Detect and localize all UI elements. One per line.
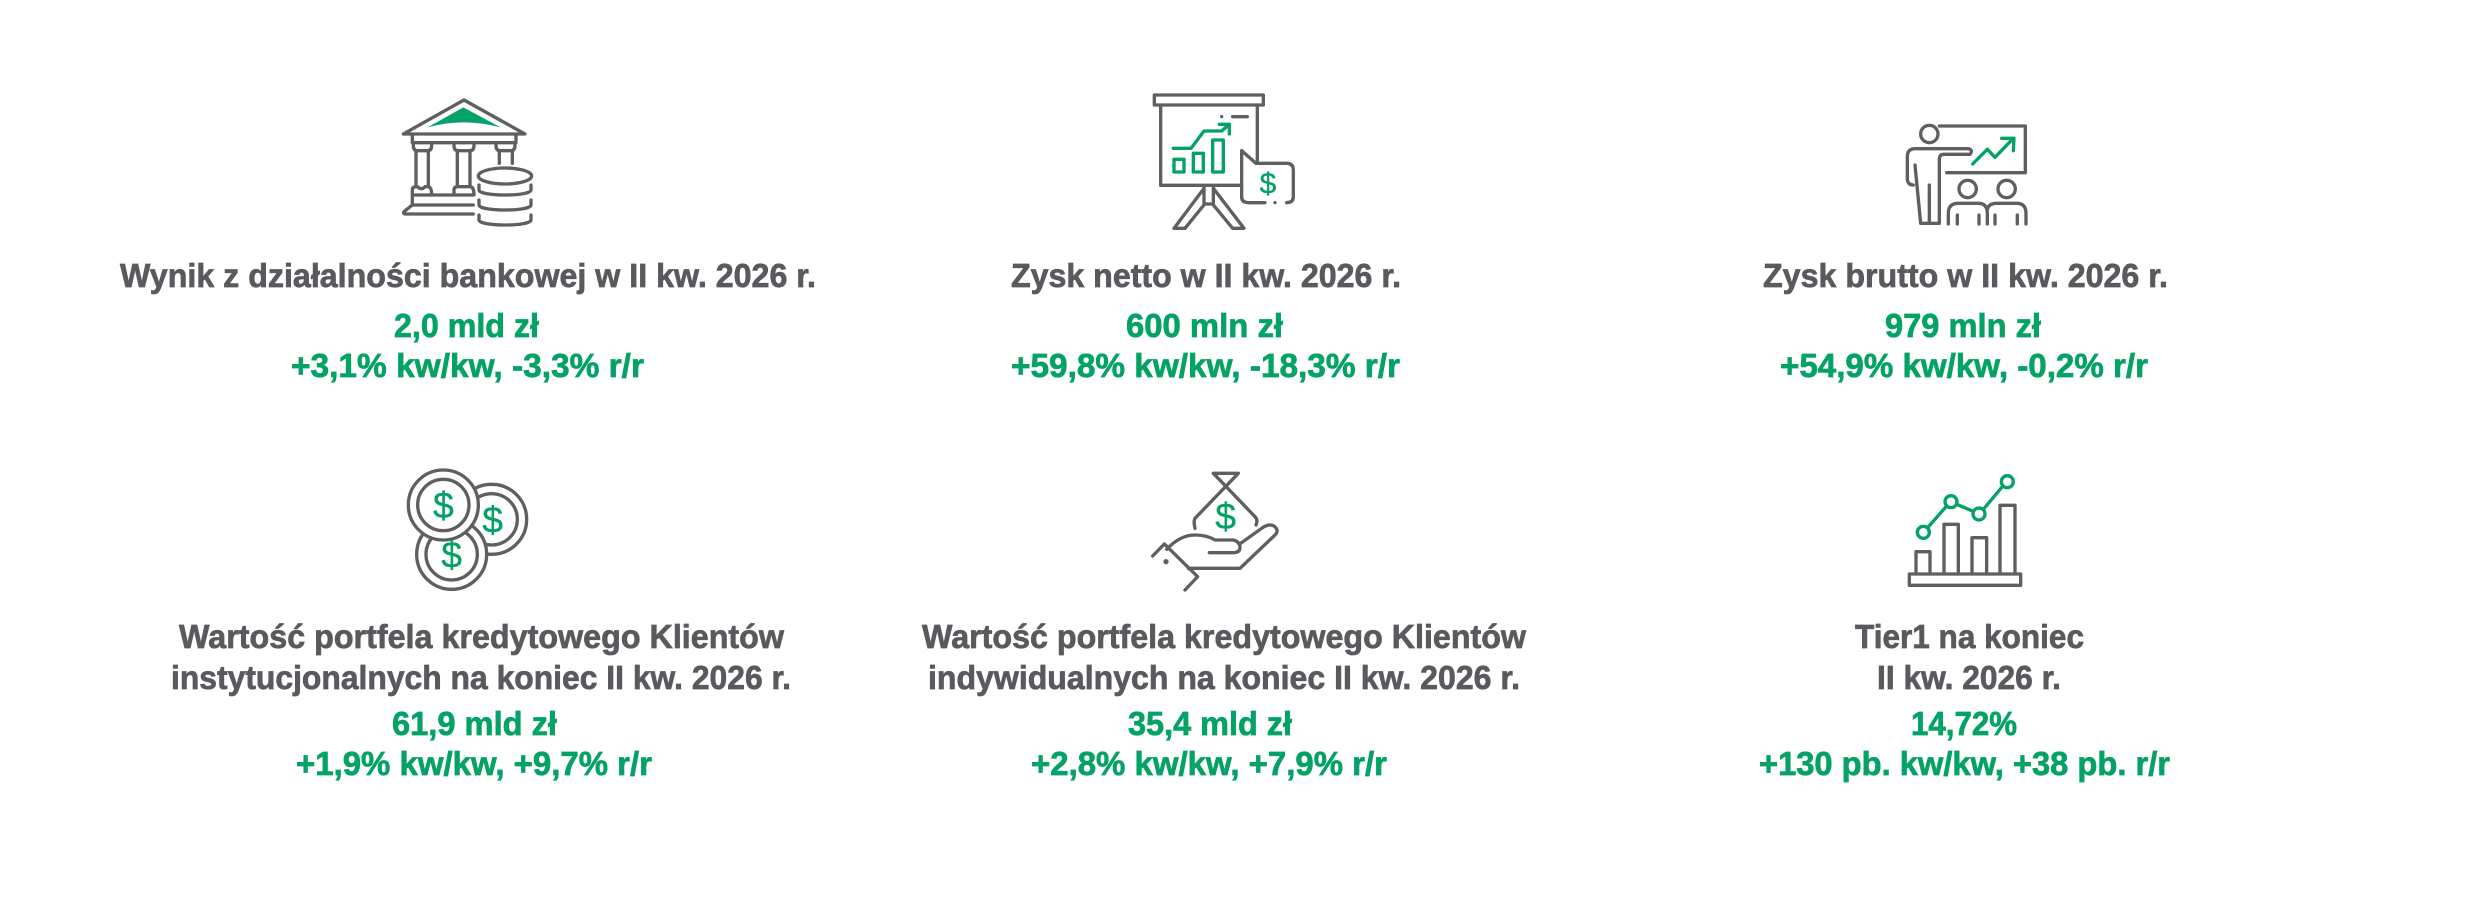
change: institutional loans: +1,9% kw/kw, +9,7% r/r	[296, 745, 652, 782]
panel: retail loans	[922, 473, 1526, 782]
heading: Tier1: II kw. 2026 r.	[1877, 659, 2061, 696]
value: banking result: 2,0 mld zł	[394, 307, 539, 344]
value: institutional loans: 61,9 mld zł	[392, 705, 557, 742]
icon: hand with money bag: $	[1215, 495, 1236, 537]
icon: presentation board	[1154, 95, 1293, 228]
heading: Tier1	[1855, 618, 2084, 696]
value: retail loans: 35,4 mld zł	[1128, 705, 1292, 742]
icon: hand with money bag	[1153, 473, 1277, 590]
value: Tier1: 14,72%	[1911, 705, 2017, 742]
heading: banking result: Wynik z działalności bankowej w II kw. 2026 r.	[120, 257, 816, 294]
change: retail loans: +2,8% kw/kw, +7,9% r/r	[1031, 745, 1387, 782]
panel: banking result	[120, 100, 816, 384]
icon: bar and line chart	[1909, 476, 2021, 585]
change: Tier1: +130 pb. kw/kw, +38 pb. r/r	[1759, 745, 2170, 782]
heading: gross profit: Zysk brutto w II kw. 2026 r.	[1763, 257, 2168, 294]
icon: presentation board: $	[1260, 167, 1277, 200]
value: net profit: 600 mln zł	[1126, 307, 1283, 344]
heading: retail loans: Wartość portfela kredytowego Klientów	[922, 618, 1526, 655]
heading: net profit: Zysk netto w II kw. 2026 r.	[1011, 257, 1401, 294]
heading: Tier1: Tier1 na koniec	[1855, 618, 2084, 655]
panel: institutional loans	[171, 470, 791, 782]
panel: net profit	[1011, 95, 1401, 384]
heading: institutional loans	[171, 618, 791, 696]
value: gross profit: 979 mln zł	[1885, 307, 2041, 344]
panel: gross profit	[1763, 125, 2168, 384]
heading: institutional loans: instytucjonalnych na koniec II kw. 2026 r.	[171, 659, 791, 696]
heading: retail loans	[922, 618, 1526, 696]
icon: coins: $	[433, 484, 454, 526]
icon: coins: $	[441, 533, 462, 575]
icon: coins: $	[482, 498, 503, 540]
icon: coins	[408, 470, 527, 589]
change: net profit: +59,8% kw/kw, -18,3% r/r	[1011, 347, 1400, 384]
change: gross profit: +54,9% kw/kw, -0,2% r/r	[1780, 347, 2148, 384]
heading: institutional loans: Wartość portfela kredytowego Klientów	[179, 618, 784, 655]
icon: bank with coins	[403, 100, 532, 225]
change: banking result: +3,1% kw/kw, -3,3% r/r	[291, 347, 644, 384]
icon: presenter and audience	[1907, 125, 2026, 224]
heading: retail loans: indywidualnych na koniec II kw. 2026 r.	[928, 659, 1520, 696]
panel: Tier1	[1759, 476, 2170, 782]
